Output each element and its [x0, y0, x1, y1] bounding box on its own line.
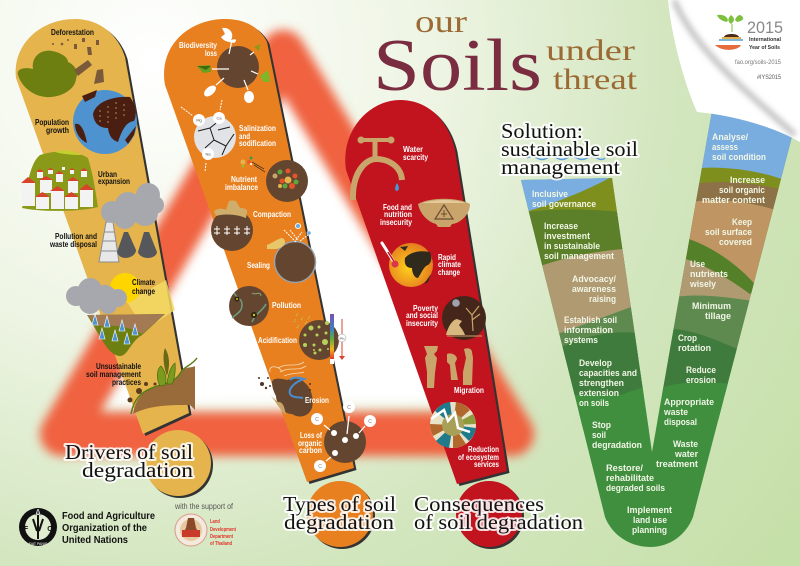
label: analyse assess soil condition: soil condition	[712, 152, 766, 163]
label: keep soil surface covered	[705, 217, 752, 248]
label: analyse assess soil condition	[712, 132, 766, 163]
text: land development department of Thailand: Department	[210, 534, 233, 540]
label: inclusive soil governance: Inclusive	[532, 189, 568, 200]
icon: FAO logo: O	[47, 526, 53, 533]
label: acidification: Acidification	[258, 336, 297, 345]
label: increase investment: Increase	[544, 221, 578, 232]
label: poverty and social insecurity: insecurity	[406, 319, 438, 328]
label: reduction of ecosystem services: of ecosystem	[458, 453, 499, 462]
icon: hot earth with thermometer	[382, 243, 433, 287]
label: inclusive soil governance: soil governance	[532, 199, 596, 210]
label: waste water treatment: water	[674, 449, 698, 460]
label: crop rotation	[678, 333, 711, 354]
label: pollution and waste disposal: Pollution and	[55, 232, 97, 241]
title: our soils under threat: Soils	[373, 25, 542, 107]
icon: land development department logo	[175, 514, 207, 546]
label: use nutrients wisely: wisely	[689, 279, 717, 290]
label: develop capacities: extension	[579, 388, 619, 399]
label: poverty and social insecurity: and social	[406, 311, 438, 320]
label: water scarcity: scarcity	[403, 153, 428, 162]
label: reduction of ecosystem services	[458, 445, 499, 469]
text: year and hashtags	[735, 18, 783, 81]
heading: solution sustainable soil management: Solution:	[501, 119, 583, 143]
label: rapid climate change: change	[438, 268, 460, 277]
label: population growth: Population	[35, 118, 69, 127]
label: erosion: Erosion	[305, 396, 329, 405]
panel: drivers of soil degradation	[16, 19, 213, 498]
icon: acidification: Ph	[340, 336, 344, 341]
text: land development department of Thailand: of Thailand	[210, 541, 232, 547]
label: rapid climate change: Rapid	[438, 253, 456, 262]
icon: urban expansion	[21, 150, 98, 211]
label: stop soil degradation	[592, 420, 642, 451]
label: nutrient imbalance: Nutrient	[231, 175, 257, 184]
label: appropriate waste disposal: disposal	[664, 417, 697, 428]
title: our soils under threat: threat	[553, 63, 638, 96]
icon: FAO logo: FIAT PANIS	[29, 542, 48, 546]
icon: ecosystem wheel	[430, 402, 476, 448]
label: salinization and sodification	[239, 124, 276, 148]
text: with the support of: with the support of	[174, 502, 234, 511]
label: loss of organic carbon: carbon	[299, 446, 322, 455]
label: climate change: Climate	[132, 278, 155, 287]
label: biodiversity loss: loss	[205, 49, 217, 58]
label: develop capacities: Develop	[579, 358, 612, 369]
heading: consequences of soil degradation: of soil degradation	[414, 510, 584, 534]
panel: consequences of soil degradation	[345, 100, 524, 549]
label: food and nutrition insecurity	[380, 203, 412, 227]
label: poverty and social insecurity	[406, 304, 438, 328]
label: advocacy awareness raising: Advocacy/	[572, 274, 616, 285]
title: our soils under threat: under	[546, 34, 635, 67]
icon: pollution and waste	[99, 183, 164, 262]
label: unsustainable soil management practices: soil management	[86, 370, 141, 379]
label: compaction: Compaction	[253, 210, 291, 219]
panel: types of soil degradation	[164, 19, 376, 549]
icon: overpopulated globe	[73, 90, 137, 154]
icon: salinization: Mg	[196, 118, 202, 122]
title: our soils under threat	[373, 3, 638, 107]
label: keep soil surface covered: covered	[719, 237, 752, 248]
label: nutrient imbalance	[225, 175, 258, 192]
label: stop soil degradation: degradation	[592, 440, 642, 451]
icon: salinization: Ca	[216, 116, 222, 120]
label: stop soil degradation: Stop	[592, 420, 611, 431]
title: our soils under threat: our	[415, 3, 467, 39]
label: implement land use planning: planning	[632, 525, 667, 536]
label: urban expansion	[98, 170, 130, 186]
label: increase soil organic matter: soil organic	[719, 185, 765, 196]
label: reduce erosion	[686, 365, 716, 386]
text: land development department of Thailand	[210, 519, 236, 547]
label: water scarcity: Water	[403, 145, 423, 154]
label: waste water treatment: treatment	[656, 459, 699, 470]
panel: solution V shape	[510, 100, 800, 547]
label: food and nutrition insecurity: Food and	[383, 203, 412, 212]
label: climate change: change	[132, 287, 155, 296]
label: restore rehabilitate degraded soils: Restore/	[606, 463, 643, 474]
label: use nutrients wisely: Use	[690, 259, 705, 270]
label: restore rehabilitate degraded soils: degraded soils	[606, 483, 665, 494]
text: FAO name: Organization of the	[62, 522, 147, 534]
label: analyse assess soil condition: assess	[712, 142, 738, 153]
red warning triangle	[62, 52, 512, 434]
icon: biodiversity loss	[197, 28, 270, 103]
label: poverty and social insecurity: Poverty	[413, 304, 438, 313]
label: inclusive soil governance	[532, 189, 596, 210]
icon: tap with drop	[353, 136, 402, 200]
label: crop rotation: rotation	[678, 343, 711, 354]
label: restore rehabilitate degraded soils: rehabilitate	[606, 473, 654, 484]
label: crop rotation: Crop	[678, 333, 697, 344]
label: water scarcity	[403, 145, 428, 162]
label: nutrient imbalance: imbalance	[225, 183, 258, 192]
icon: deforestation	[18, 38, 104, 97]
label: minimum tillage: tillage	[705, 311, 731, 322]
icon: loss of organic carbon	[311, 401, 376, 472]
label: appropriate waste disposal: waste	[663, 407, 688, 418]
heading: types of soil degradation	[283, 492, 396, 534]
label: reduction of ecosystem services: Reduction	[468, 445, 499, 454]
label: pollution: Pollution	[272, 301, 301, 310]
icon: salinization	[181, 100, 236, 172]
icon: poverty scene	[442, 296, 486, 340]
text: year and hashtags: fao.org/soils-2015	[735, 60, 782, 66]
icon: salinization: Na	[205, 152, 211, 156]
icon: loss of organic carbon: C	[368, 419, 372, 425]
label: biodiversity loss	[179, 41, 217, 58]
label: keep soil surface covered: Keep	[732, 217, 752, 228]
label: salinization and sodification: Salinization	[239, 124, 276, 133]
label: develop capacities	[579, 358, 637, 409]
label: appropriate waste disposal	[663, 397, 714, 428]
text: FAO name: Food and Agriculture	[62, 510, 155, 522]
label: salinization and sodification: sodification	[239, 139, 276, 148]
label: loss of organic carbon: organic	[298, 439, 322, 448]
label: pollution and waste disposal: waste disposal	[49, 240, 97, 249]
icon: international year of soils logo	[715, 15, 743, 50]
heading: solution sustainable soil management: sustainable soil	[501, 137, 638, 161]
label: minimum tillage: Minimum	[692, 301, 731, 312]
label: rapid climate change: climate	[438, 260, 461, 269]
label: reduction of ecosystem services: services	[474, 460, 499, 469]
label: develop capacities: capacities and	[579, 368, 637, 379]
label: increase investment: in sustainable	[544, 241, 600, 252]
label: population growth: growth	[46, 126, 69, 135]
label: increase soil organic matter	[702, 175, 766, 206]
icon: pollution	[229, 286, 269, 326]
icon: loss of organic carbon: C	[347, 405, 351, 411]
label: advocacy awareness raising: awareness	[572, 284, 616, 295]
label: migration: Migration	[454, 386, 484, 395]
label: food and nutrition insecurity: insecurity	[380, 218, 412, 227]
label: advocacy awareness raising: raising	[589, 294, 616, 305]
heading: types of soil degradation: degradation	[284, 510, 395, 534]
label: use nutrients wisely: nutrients	[690, 269, 728, 280]
icon: acidification	[294, 313, 346, 364]
icon: nutrient imbalance	[240, 156, 308, 202]
icon: FAO logo	[19, 508, 57, 546]
white triangle glow	[100, 85, 480, 408]
icon: compaction	[211, 201, 253, 251]
icon: FAO logo: A	[35, 508, 41, 517]
label: reduce erosion: Reduce	[686, 365, 716, 376]
text: year and hashtags: #IYS2015	[757, 75, 782, 81]
text: land development department of Thailand: Land	[210, 519, 220, 525]
label: increase investment	[544, 221, 615, 262]
icon: sealing	[267, 224, 316, 282]
label: unsustainable soil management practices	[86, 362, 141, 387]
label: analyse assess soil condition: Analyse/	[712, 132, 748, 143]
label: unsustainable soil management practices: practices	[112, 378, 141, 387]
label: implement land use planning: Implement	[627, 505, 673, 516]
icon: unsustainable soil management	[128, 348, 197, 414]
label: develop capacities: strengthen	[579, 378, 624, 389]
heading: drivers of soil degradation	[65, 440, 194, 482]
heading: consequences of soil degradation: Consequences	[414, 492, 544, 516]
label: establish soil information systems: Establish soil	[564, 315, 617, 326]
label: increase investment: soil management	[544, 251, 615, 262]
text: FAO name: United Nations	[62, 534, 128, 546]
label: keep soil surface covered: soil surface	[705, 227, 752, 238]
label: establish soil information systems: systems	[564, 335, 598, 346]
label: sealing: Sealing	[247, 261, 270, 270]
label: establish soil information systems: information	[564, 325, 613, 336]
label: pollution and waste disposal	[49, 232, 97, 249]
text: year and hashtags: 2015	[747, 18, 783, 37]
icon: loss of organic carbon: C	[318, 464, 322, 470]
label: unsustainable soil management practices: Unsustainable	[96, 362, 141, 371]
label: population growth	[35, 118, 69, 135]
label: stop soil degradation: soil	[592, 430, 606, 441]
icon: FAO logo: F	[24, 526, 29, 533]
label: loss of organic carbon: Loss of	[300, 431, 322, 440]
label: increase investment: investment	[544, 231, 591, 242]
label: salinization and sodification: and	[239, 132, 250, 141]
text: year and hashtags: Year of Soils	[749, 45, 780, 51]
label: climate change	[132, 278, 155, 296]
label: food and nutrition insecurity: nutrition	[384, 210, 412, 219]
heading: consequences of soil degradation	[414, 492, 584, 534]
heading: drivers of soil degradation: Drivers of soil	[65, 440, 193, 464]
label: restore rehabilitate degraded soils	[606, 463, 665, 494]
icon: empty bowl	[418, 199, 470, 227]
label: waste water treatment	[656, 439, 699, 470]
label: increase soil organic matter: Increase	[730, 175, 765, 186]
label: biodiversity loss: Biodiversity	[179, 41, 217, 50]
label: advocacy awareness raising	[572, 274, 616, 305]
icon: migrants	[424, 346, 473, 388]
label: rapid climate change	[438, 253, 461, 277]
text: land development department of Thailand: Development	[210, 527, 236, 533]
label: implement land use planning	[627, 505, 673, 536]
label: establish soil information systems	[564, 315, 617, 346]
text: year and hashtags: International	[749, 37, 781, 43]
text: FAO name	[62, 510, 155, 546]
label: develop capacities: on soils	[579, 398, 609, 409]
label: minimum tillage	[692, 301, 731, 322]
heading: types of soil degradation: Types of soil	[283, 492, 396, 516]
icon: climate change	[66, 273, 175, 356]
label: urban expansion: Urban	[98, 170, 117, 179]
label: use nutrients wisely	[689, 259, 728, 290]
label: urban expansion: expansion	[98, 177, 130, 186]
label: appropriate waste disposal: Appropriate	[664, 397, 714, 408]
heading: solution sustainable soil management: management	[501, 155, 620, 179]
label: reduce erosion: erosion	[686, 375, 716, 386]
heading: solution sustainable soil management	[501, 119, 638, 179]
page curl corner	[668, 0, 800, 142]
label: waste water treatment: Waste	[673, 439, 698, 450]
heading: drivers of soil degradation: degradation	[82, 458, 194, 482]
label: loss of organic carbon	[298, 431, 322, 455]
label: deforestation: Deforestation	[51, 28, 94, 37]
label: implement land use planning: land use	[633, 515, 667, 526]
icon: erosion	[258, 362, 313, 416]
label: increase soil organic matter: matter content	[702, 195, 766, 206]
icon: loss of organic carbon: C	[315, 417, 319, 423]
